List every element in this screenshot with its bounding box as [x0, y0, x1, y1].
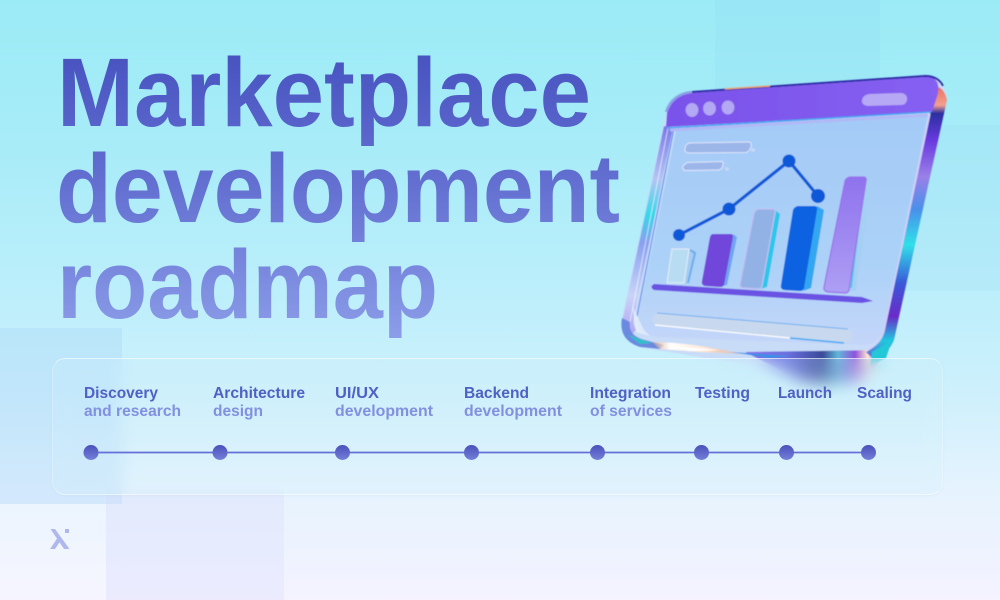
- timeline stage labels: Discovery: [84, 385, 158, 402]
- title: development: [56, 134, 620, 243]
- timeline stage labels: Integration: [590, 385, 671, 402]
- icon: logo mark: [50, 529, 70, 549]
- chart baseline: [652, 284, 873, 303]
- title: [56, 38, 620, 339]
- timeline stage labels: Architecture: [213, 385, 305, 402]
- timeline stage labels: design: [213, 403, 263, 420]
- timeline stage labels: development: [464, 403, 563, 420]
- window header bar: [666, 76, 943, 130]
- timeline stage labels: Testing: [695, 385, 750, 402]
- title: Marketplace: [57, 38, 591, 147]
- title: roadmap: [57, 230, 438, 339]
- timeline stage labels: development: [335, 403, 434, 420]
- window frame: [621, 76, 947, 384]
- timeline stage labels: Backend: [464, 385, 529, 402]
- line chart: [673, 154, 825, 241]
- text placeholder bars: [683, 142, 755, 171]
- timeline stage labels: of services: [590, 403, 672, 420]
- timeline stage labels: UI/UX: [335, 385, 379, 402]
- timeline panel: [52, 358, 943, 495]
- bottom placeholder bar: [652, 313, 852, 343]
- glass window illustration: [620, 74, 948, 394]
- bar chart: [666, 177, 872, 293]
- timeline stage labels: Scaling: [857, 385, 912, 402]
- timeline stage labels: Launch: [778, 385, 832, 402]
- timeline stage labels: and research: [84, 403, 181, 420]
